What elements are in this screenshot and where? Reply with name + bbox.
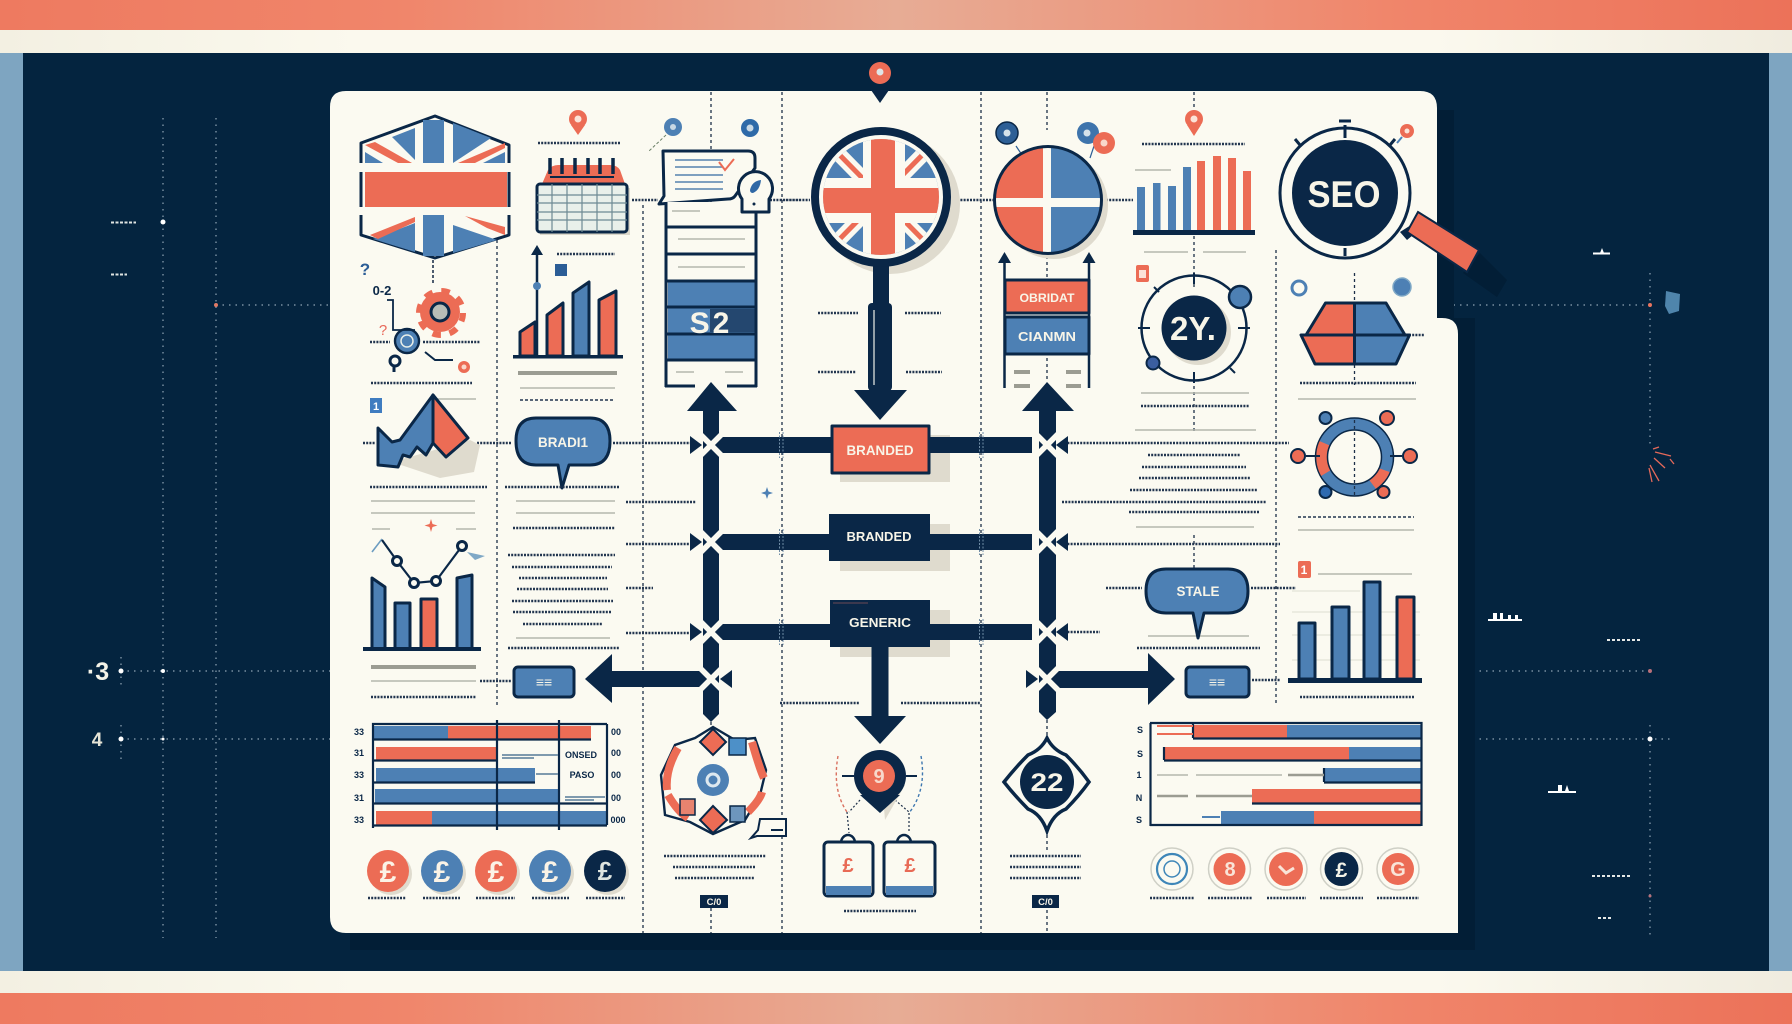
icon: 2Y orbit: 2Y. — [1170, 310, 1216, 347]
icon: 22 compass badge — [1004, 738, 1089, 908]
small blue box left: ≡≡ — [536, 674, 552, 690]
icon: 22 compass badge: C/0 — [1038, 897, 1053, 908]
icons: left pound coins: £ — [598, 856, 613, 886]
chart: right horizontal bars: S — [1137, 725, 1143, 735]
icon: location pin with bags links: 9 — [873, 766, 885, 788]
chart: right horizontal bars: S — [1136, 815, 1142, 825]
box: GENERIC navy — [830, 600, 930, 647]
callout: STALE speech bubble — [1146, 569, 1248, 638]
icons: right circle badges: £ — [1336, 859, 1348, 882]
bar shadows behind central boxes — [840, 435, 950, 657]
icon: SEO magnifier: SEO — [1308, 174, 1380, 215]
chart: left horizontal bars: 00 — [611, 793, 621, 803]
diagram: stacked label boxes with thin arrows: CIANMN — [1018, 329, 1076, 344]
icon: union jack hexagon — [358, 116, 512, 258]
chart: small rising bars — [513, 245, 623, 400]
background grid marks left: 4 — [92, 730, 103, 751]
icons: left pound coins: £ — [434, 856, 451, 889]
icon: price bags: £ — [842, 855, 854, 877]
icons: left pound coins: £ — [488, 856, 505, 889]
chart: left horizontal bars: 33 — [354, 727, 364, 737]
icon: pin above calendar — [538, 110, 620, 143]
chart: right horizontal bars — [1136, 723, 1422, 826]
text block: left column notes — [370, 487, 620, 648]
icon: top pin — [869, 62, 891, 103]
icons: left pound coins — [367, 850, 629, 898]
chart: bars with trend line — [363, 539, 485, 697]
icon: SEO magnifier — [1280, 121, 1479, 272]
callout: BRADI1 speech bubble — [516, 418, 610, 488]
panel shadow — [350, 110, 1507, 950]
icon: mountain area chart — [370, 395, 480, 478]
icon: gear cluster — [360, 260, 480, 383]
icons: left pound coins: £ — [380, 856, 397, 889]
chart: top right bars — [1133, 110, 1255, 252]
icon: 2Y orbit — [1135, 265, 1256, 430]
icon: gear cluster: 0-2 — [373, 283, 391, 298]
small blue box left — [514, 667, 574, 697]
flow diagram: navy connectors and arrows — [585, 382, 1175, 744]
icon: settings badge — [661, 727, 766, 834]
icon: ring with knobs — [1291, 411, 1417, 530]
small blue box right — [1186, 667, 1249, 697]
chart: left horizontal bars: ONSED — [565, 750, 597, 760]
text block and tag under badge: C/0 — [707, 897, 721, 908]
chart: left horizontal bars: 00 — [611, 727, 621, 737]
box: GENERIC navy: GENERIC — [849, 615, 912, 630]
diagram: stacked label boxes with thin arrows: OBRIDAT — [1020, 291, 1075, 305]
icons: right circle badges: G — [1390, 859, 1406, 881]
callout: STALE speech bubble: STALE — [1176, 583, 1220, 599]
icon: union jack magnifier — [815, 131, 960, 420]
icon: price bags — [824, 835, 935, 896]
chart: right column bars — [1288, 561, 1422, 697]
table: S2 stack: S2 — [690, 307, 732, 340]
icon: location pin with bags links — [836, 750, 922, 833]
chart: left horizontal bars: 31 — [354, 793, 364, 803]
icons: left pound coins: £ — [542, 856, 559, 889]
icon: light bulb — [738, 172, 772, 212]
callout: BRADI1 speech bubble: BRADI1 — [538, 434, 588, 450]
chart: right horizontal bars: S — [1137, 749, 1143, 759]
chart: left horizontal bars: 00 — [611, 748, 621, 758]
chart: left horizontal bars: 000 — [610, 815, 626, 825]
chart: left horizontal bars: 00 — [611, 770, 621, 780]
box: BRANDED coral: BRANDED — [846, 442, 914, 458]
icon: mountain area chart: 1 — [373, 401, 379, 413]
chart: right horizontal bars: 1 — [1136, 770, 1142, 780]
icon: gear cluster: ? — [379, 322, 387, 339]
icons: right circle badges: 8 — [1224, 859, 1236, 881]
hatch ticks over connectors — [780, 432, 983, 645]
box: BRANDED coral — [832, 426, 929, 473]
chart: right column bars: 1 — [1301, 563, 1308, 577]
chart: right horizontal bars: N — [1136, 793, 1142, 803]
crossings right — [1026, 431, 1068, 693]
text block: center right notes — [1062, 455, 1266, 648]
icon: gear cluster: ? — [360, 260, 370, 279]
icon: note card with check — [649, 118, 759, 204]
table: S2 stack — [665, 202, 757, 387]
icon: calendar — [537, 158, 630, 235]
icons: right circle badges — [1150, 848, 1419, 898]
crossings left — [690, 431, 732, 693]
icon: price bags: £ — [904, 855, 916, 877]
chart: left horizontal bars — [354, 720, 626, 830]
background grid marks left — [87, 118, 330, 938]
main cream panel — [330, 91, 1458, 933]
box: BRANDED navy: BRANDED — [846, 529, 912, 544]
icon: 22 compass badge: 22 — [1030, 769, 1064, 797]
icon: small blue star — [761, 487, 773, 499]
icon: split hexagon — [1292, 278, 1416, 399]
chart: left horizontal bars: 31 — [354, 748, 364, 758]
chart: left horizontal bars: 33 — [354, 815, 364, 825]
chart: left horizontal bars: 33 — [354, 770, 364, 780]
text block and tag under badge — [664, 856, 766, 908]
text line under bags — [844, 910, 916, 912]
icon: small note — [751, 819, 786, 838]
box: BRANDED navy — [829, 514, 930, 561]
chart: left horizontal bars: PASO — [570, 770, 594, 780]
background grid marks right — [1447, 248, 1680, 937]
background grid marks left: ·3 — [87, 658, 109, 686]
diagram: stacked label boxes with thin arrows — [998, 252, 1096, 388]
icon: split circle with pins — [990, 122, 1115, 260]
small blue box right: ≡≡ — [1209, 674, 1225, 690]
dashed column guides — [363, 92, 1425, 933]
